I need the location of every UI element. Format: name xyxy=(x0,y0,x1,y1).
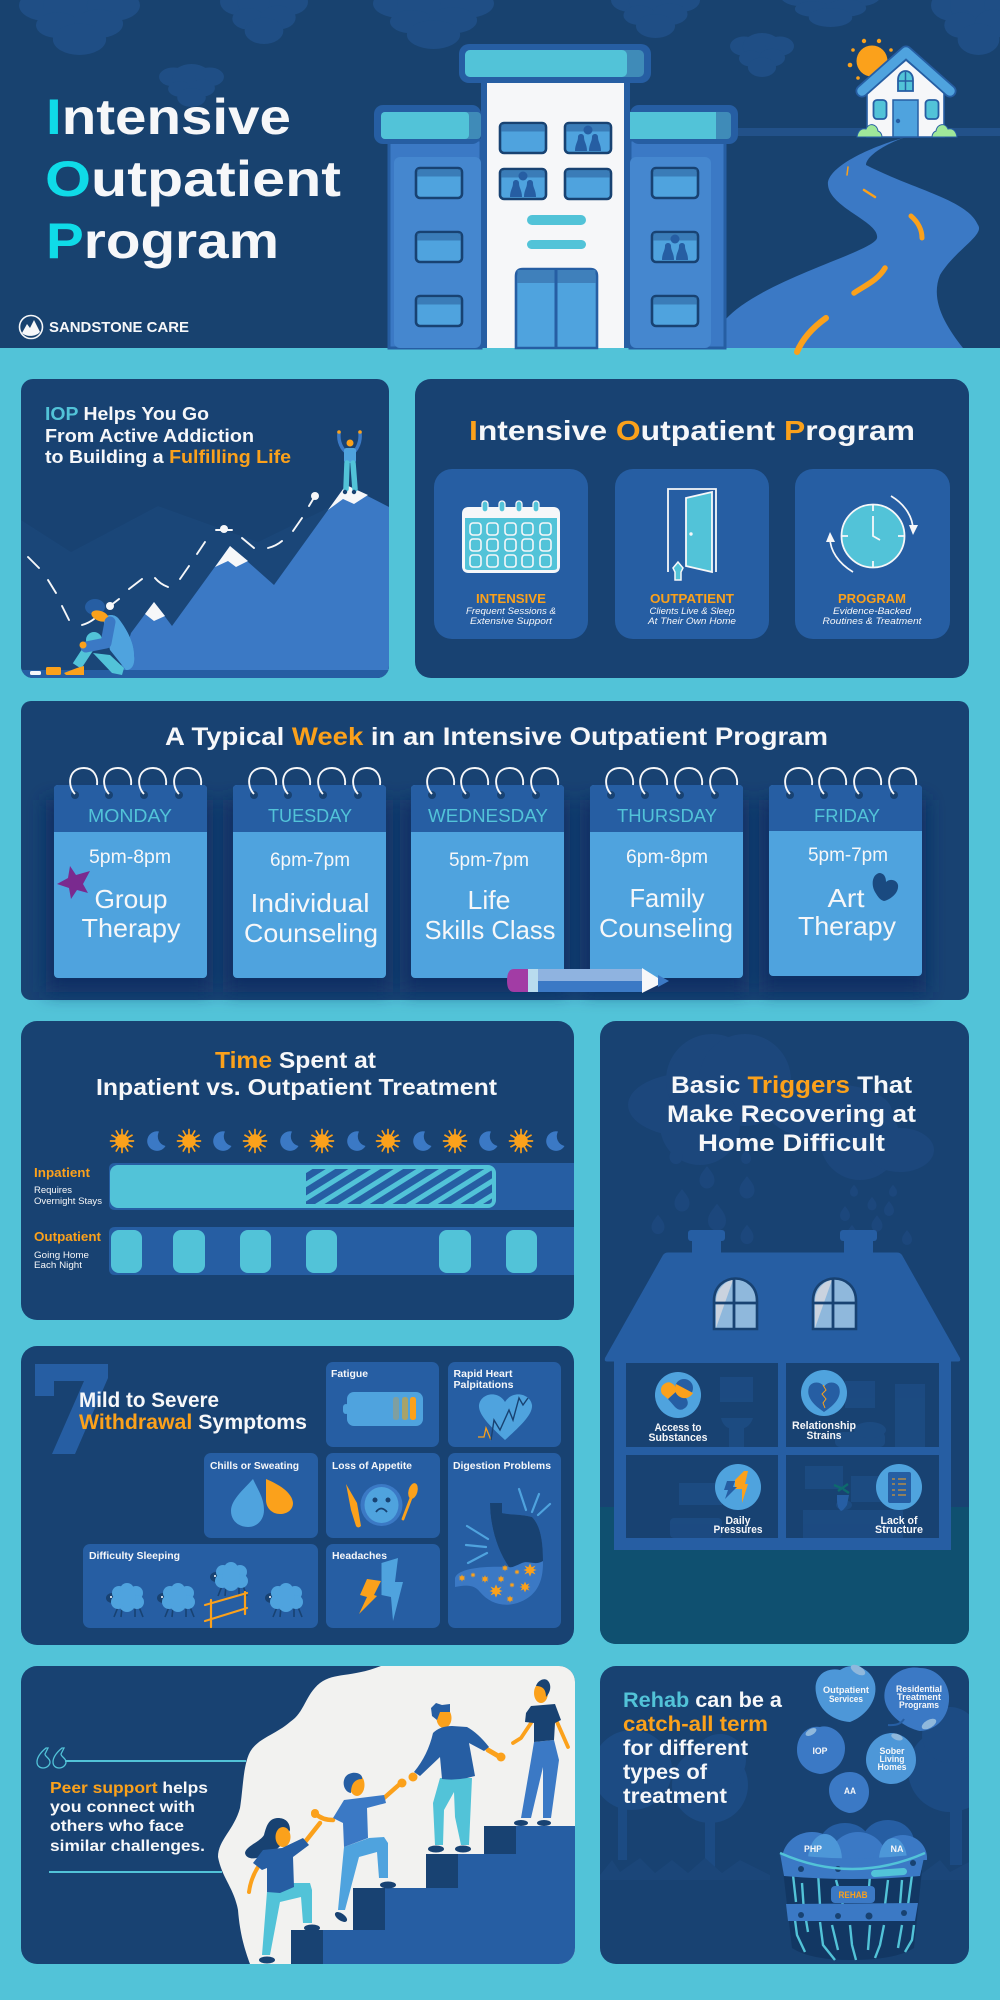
trigger: relationship strains: Strains xyxy=(806,1430,842,1442)
trigger: access to substances: Substances xyxy=(648,1432,708,1444)
panel: basic triggers xyxy=(600,1021,969,1644)
card: headaches: Headaches xyxy=(332,1551,387,1562)
storm clouds and rain xyxy=(600,1034,969,1644)
apples in basket: PHP xyxy=(804,1844,823,1855)
house cross-section xyxy=(605,1230,960,1550)
figure: woman on lowest step xyxy=(245,1810,320,1964)
calendar: Tuesday xyxy=(233,768,386,978)
heading xyxy=(79,1389,307,1434)
text: rehab catch-all term: for different xyxy=(623,1737,748,1760)
label: inpatient xyxy=(34,1165,102,1207)
card: headaches xyxy=(326,1544,440,1628)
heading: A Typical Week in an Intensive Outpatient Program xyxy=(165,723,828,751)
calendar: Monday: Therapy xyxy=(82,913,180,943)
bar: outpatient xyxy=(109,1227,574,1275)
calendar: Friday xyxy=(769,768,922,976)
card: digestion problems: Digestion Problems xyxy=(453,1461,551,1472)
panel: a typical week xyxy=(21,701,969,1000)
calendar: Thursday: 6pm-8pm xyxy=(626,847,708,868)
label: inpatient: Overnight Stays xyxy=(34,1196,102,1207)
text: peer support xyxy=(50,1780,208,1855)
card: outpatient xyxy=(615,469,769,639)
logo: Sandstone Care xyxy=(20,316,189,338)
card: chills or sweating: Chills or Sweating xyxy=(210,1461,299,1472)
text: rehab catch-all term: Rehab can be a xyxy=(623,1689,782,1712)
apple: AA xyxy=(829,1772,869,1813)
icon: potted plant xyxy=(834,1484,849,1511)
heading: Inpatient vs. Outpatient Treatment xyxy=(96,1074,497,1100)
title: Program xyxy=(46,213,279,269)
calendar: Wednesday: Life xyxy=(468,885,510,915)
calendar: Monday: MONDAY xyxy=(88,806,172,826)
figure: man on second step xyxy=(311,1773,406,1924)
icon: person celebrating on summit xyxy=(337,430,362,494)
sun xyxy=(848,39,893,80)
panel: IOP recovery journey xyxy=(21,379,389,678)
label: outpatient: Clients Live & Sleep xyxy=(650,606,734,617)
trigger: relationship strains: Relationship xyxy=(792,1420,856,1432)
label: program: Routines & Treatment xyxy=(822,616,922,627)
header banner xyxy=(0,0,1000,352)
label: intensive: Extensive Support xyxy=(470,616,552,627)
attic window left xyxy=(714,1278,757,1329)
basket: rehab xyxy=(780,1853,925,1960)
apple: sober living homes: Living xyxy=(880,1754,905,1765)
panel: Intensive Outpatient Program definitions xyxy=(415,379,969,678)
calendar: Friday: FRIDAY xyxy=(814,806,880,826)
text: rehab catch-all term: treatment xyxy=(623,1785,727,1808)
figure: woman at top of stairs xyxy=(513,1679,568,1826)
card: chills or sweating xyxy=(204,1453,318,1538)
panel: rehab apple basket xyxy=(592,1663,992,1964)
heading: Basic Triggers That xyxy=(671,1072,912,1099)
calendar: Thursday xyxy=(590,768,743,978)
apple: sober living homes xyxy=(866,1732,916,1784)
background clouds xyxy=(19,0,1000,107)
label: intensive xyxy=(466,591,556,627)
card: loss of appetite xyxy=(326,1453,440,1538)
card: intensive xyxy=(434,469,588,639)
heading: IOP helps you go: From Active Addiction xyxy=(45,426,254,446)
calendar: Wednesday xyxy=(411,768,564,978)
heading xyxy=(96,1047,497,1100)
label: outpatient: Each Night xyxy=(34,1260,82,1271)
trigger: daily pressures: Pressures xyxy=(714,1524,762,1536)
road xyxy=(725,137,979,352)
label: program: Evidence-Backed xyxy=(833,606,912,617)
text: rehab catch-all term: catch-all term xyxy=(623,1713,768,1736)
apples in basket xyxy=(783,1820,927,1860)
calendar: Tuesday: Individual xyxy=(250,888,370,918)
trigger: lack of structure: Structure xyxy=(875,1524,923,1536)
calendar: Wednesday: WEDNESDAY xyxy=(428,806,548,826)
card: fatigue xyxy=(326,1362,439,1447)
heading: IOP helps you go xyxy=(45,404,291,467)
faint trees and grass xyxy=(600,1707,969,1867)
label: intensive: Frequent Sessions & xyxy=(466,606,556,617)
label: program xyxy=(822,591,922,627)
calendar: Monday: Group xyxy=(94,884,168,914)
apple: sober living homes: Sober xyxy=(880,1746,905,1757)
panel: time spent inpatient vs outpatient xyxy=(21,1021,574,1320)
faint room furniture xyxy=(670,1377,925,1538)
trigger: access to substances: Access to xyxy=(654,1422,702,1434)
heading: Mild to Severe xyxy=(79,1389,219,1412)
label: intensive: INTENSIVE xyxy=(476,591,546,606)
text: peer support: similar challenges. xyxy=(50,1838,205,1855)
house xyxy=(857,52,957,137)
card: loss of appetite: Loss of Appetite xyxy=(332,1461,412,1472)
card: rapid heart palpitations xyxy=(448,1362,561,1447)
basket: rehab: REHAB xyxy=(838,1890,868,1901)
horizon line xyxy=(738,128,1000,136)
icon: open door xyxy=(668,489,716,580)
apple: residential treatment programs xyxy=(884,1667,949,1731)
attic window right xyxy=(813,1278,856,1329)
quote mark and rules xyxy=(37,1748,246,1873)
trigger: relationship strains xyxy=(792,1370,856,1442)
apple: outpatient services: Services xyxy=(829,1694,863,1705)
apple: residential treatment programs: Programs xyxy=(899,1700,939,1711)
heading: Intensive Outpatient Program xyxy=(469,415,915,446)
card: digestion problems xyxy=(448,1453,561,1628)
apples in basket: NA xyxy=(890,1844,904,1855)
calendar: Friday: Art xyxy=(828,883,865,913)
label: inpatient: Inpatient xyxy=(34,1165,91,1180)
figure: man on third step xyxy=(408,1703,506,1852)
heading: Time Spent at xyxy=(215,1047,376,1073)
calendar: Tuesday: TUESDAY xyxy=(268,806,352,826)
calendar: Thursday: Family xyxy=(630,883,704,913)
apple: residential treatment programs: Treatment xyxy=(897,1692,942,1703)
panel: peer support xyxy=(21,1666,575,1964)
mountains illustration xyxy=(21,485,389,678)
label: outpatient: Outpatient xyxy=(34,1229,102,1244)
panel: withdrawal symptoms xyxy=(21,1346,574,1645)
white blob background xyxy=(218,1666,575,1964)
calendar: Wednesday: Skills Class xyxy=(424,915,556,945)
apple: IOP: IOP xyxy=(812,1746,828,1757)
apple: residential treatment programs: Residential xyxy=(896,1684,942,1695)
text: peer support: Peer support helps xyxy=(50,1780,208,1797)
icon: pencil xyxy=(507,968,669,993)
big number seven xyxy=(35,1364,108,1454)
text: peer support: others who face xyxy=(50,1818,184,1835)
calendar: Wednesday: 5pm-7pm xyxy=(449,850,529,871)
calendar: Tuesday: 6pm-7pm xyxy=(270,850,350,871)
icon: person sitting xyxy=(30,599,134,675)
trigger: daily pressures xyxy=(714,1464,762,1536)
trigger: lack of structure: Lack of xyxy=(880,1515,918,1527)
label: outpatient: At Their Own Home xyxy=(647,616,736,627)
text: rehab catch-all term xyxy=(623,1689,782,1808)
card: rapid heart palpitations: Palpitations xyxy=(454,1380,514,1391)
card: difficulty sleeping xyxy=(83,1544,318,1628)
calendar: Friday: Therapy xyxy=(798,911,896,941)
calendar: Thursday: Counseling xyxy=(599,913,733,943)
apple: AA: AA xyxy=(844,1786,856,1797)
calendar: Monday: 5pm-8pm xyxy=(89,847,171,868)
title xyxy=(45,89,341,269)
calendar: Monday xyxy=(54,768,207,978)
text: rehab catch-all term: types of xyxy=(623,1761,708,1784)
apple: IOP xyxy=(797,1726,845,1774)
icon: purple star xyxy=(57,866,90,899)
card: difficulty sleeping: Difficulty Sleeping xyxy=(89,1551,180,1562)
hospital building xyxy=(374,44,738,348)
card: fatigue: Fatigue xyxy=(331,1369,368,1380)
heading: Withdrawal Symptoms xyxy=(79,1411,307,1434)
apple: outpatient services xyxy=(816,1663,875,1722)
card: rapid heart palpitations: Rapid Heart xyxy=(454,1369,513,1380)
trigger: lack of structure xyxy=(875,1464,923,1536)
calendar: Friday: 5pm-7pm xyxy=(808,845,888,866)
title: Outpatient xyxy=(45,151,341,207)
label: inpatient: Requires xyxy=(34,1185,72,1196)
day and night icons xyxy=(110,1130,564,1152)
label: outpatient: Going Home xyxy=(34,1250,89,1261)
dashed climbing path xyxy=(28,492,319,625)
trigger: daily pressures: Daily xyxy=(726,1515,751,1527)
apple: outpatient services: Outpatient xyxy=(823,1685,870,1696)
label: outpatient xyxy=(34,1229,102,1271)
heading: Home Difficult xyxy=(698,1130,885,1157)
icon: navy heart xyxy=(873,873,898,901)
bar: inpatient xyxy=(109,1163,574,1210)
icon: clock with arrows xyxy=(826,496,918,572)
trigger: access to substances xyxy=(648,1372,708,1444)
heading xyxy=(667,1072,916,1157)
card: program xyxy=(795,469,950,639)
icon: calendar xyxy=(462,501,560,573)
heading: IOP helps you go: IOP Helps You Go xyxy=(45,404,209,424)
apple: sober living homes: Homes xyxy=(878,1762,906,1773)
calendar shadows xyxy=(46,800,926,992)
calendar: Thursday: THURSDAY xyxy=(617,806,717,826)
text: peer support: you connect with xyxy=(50,1799,195,1816)
calendar: Tuesday: Counseling xyxy=(244,918,378,948)
stairs xyxy=(291,1826,575,1964)
logo: Sandstone Care: SANDSTONE CARE xyxy=(49,319,189,336)
heading: IOP helps you go: to Building a Fulfilling Life xyxy=(45,447,291,467)
heading: Make Recovering at xyxy=(667,1101,916,1128)
label: program: PROGRAM xyxy=(838,591,906,606)
label: outpatient xyxy=(647,591,736,627)
title: Intensive xyxy=(46,89,291,145)
label: outpatient: OUTPATIENT xyxy=(650,591,734,606)
